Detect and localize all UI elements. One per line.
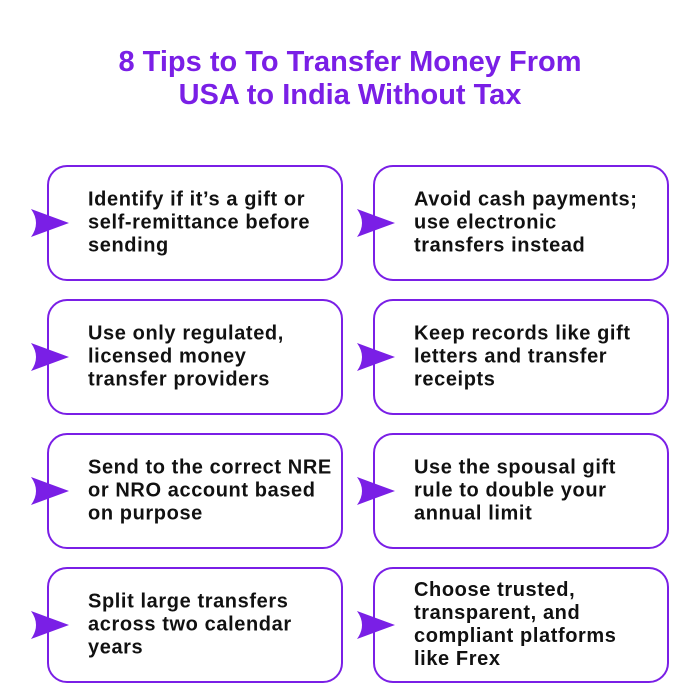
card 7 [47,567,343,683]
title: 8 Tips to To Transfer Money From [118,46,582,78]
card 6 [373,433,669,549]
card 6: rule to double your [414,480,607,502]
icon: arrow 3 [31,343,69,371]
card 1 [47,165,343,281]
card 3: Use only regulated, [88,322,284,344]
card 6: annual limit [414,502,532,524]
card 5: or NRO account based [88,480,316,502]
card 3 [47,299,343,415]
card 7: years [88,636,143,658]
icon: arrow 2 [357,209,395,237]
card 8 [373,567,669,683]
card 8: compliant platforms [414,625,617,647]
card 5: on purpose [88,502,203,524]
icon: arrow 5 [31,477,69,505]
card 5 [47,433,343,549]
card 1: sending [88,234,169,256]
card 6: Use the spousal gift [414,456,616,478]
title: USA to India Without Tax [179,79,521,111]
icon: arrow 6 [357,477,395,505]
card 1: Identify if it’s a gift or [88,188,305,210]
card 4: letters and transfer [414,346,607,368]
title [118,46,582,111]
card 3: transfer providers [88,368,270,390]
icon: arrow 8 [357,611,395,639]
card 2: Avoid cash payments; [414,188,638,210]
card 2: transfers instead [414,234,585,256]
card 2: use electronic [414,212,557,234]
card 8: Choose trusted, [414,579,575,601]
card 1: self-remittance before [88,212,310,234]
card 2 [373,165,669,281]
icon: arrow 4 [357,343,395,371]
card 5: Send to the correct NRE [88,456,332,478]
card 4: receipts [414,368,496,390]
card 4 [373,299,669,415]
icon: arrow 7 [31,611,69,639]
card 7: Split large transfers [88,590,288,612]
icon: arrow 1 [31,209,69,237]
card 8: transparent, and [414,602,580,624]
card 7: across two calendar [88,614,292,636]
card 4: Keep records like gift [414,322,631,344]
card 3: licensed money [88,346,246,368]
card 8: like Frex [414,648,501,670]
